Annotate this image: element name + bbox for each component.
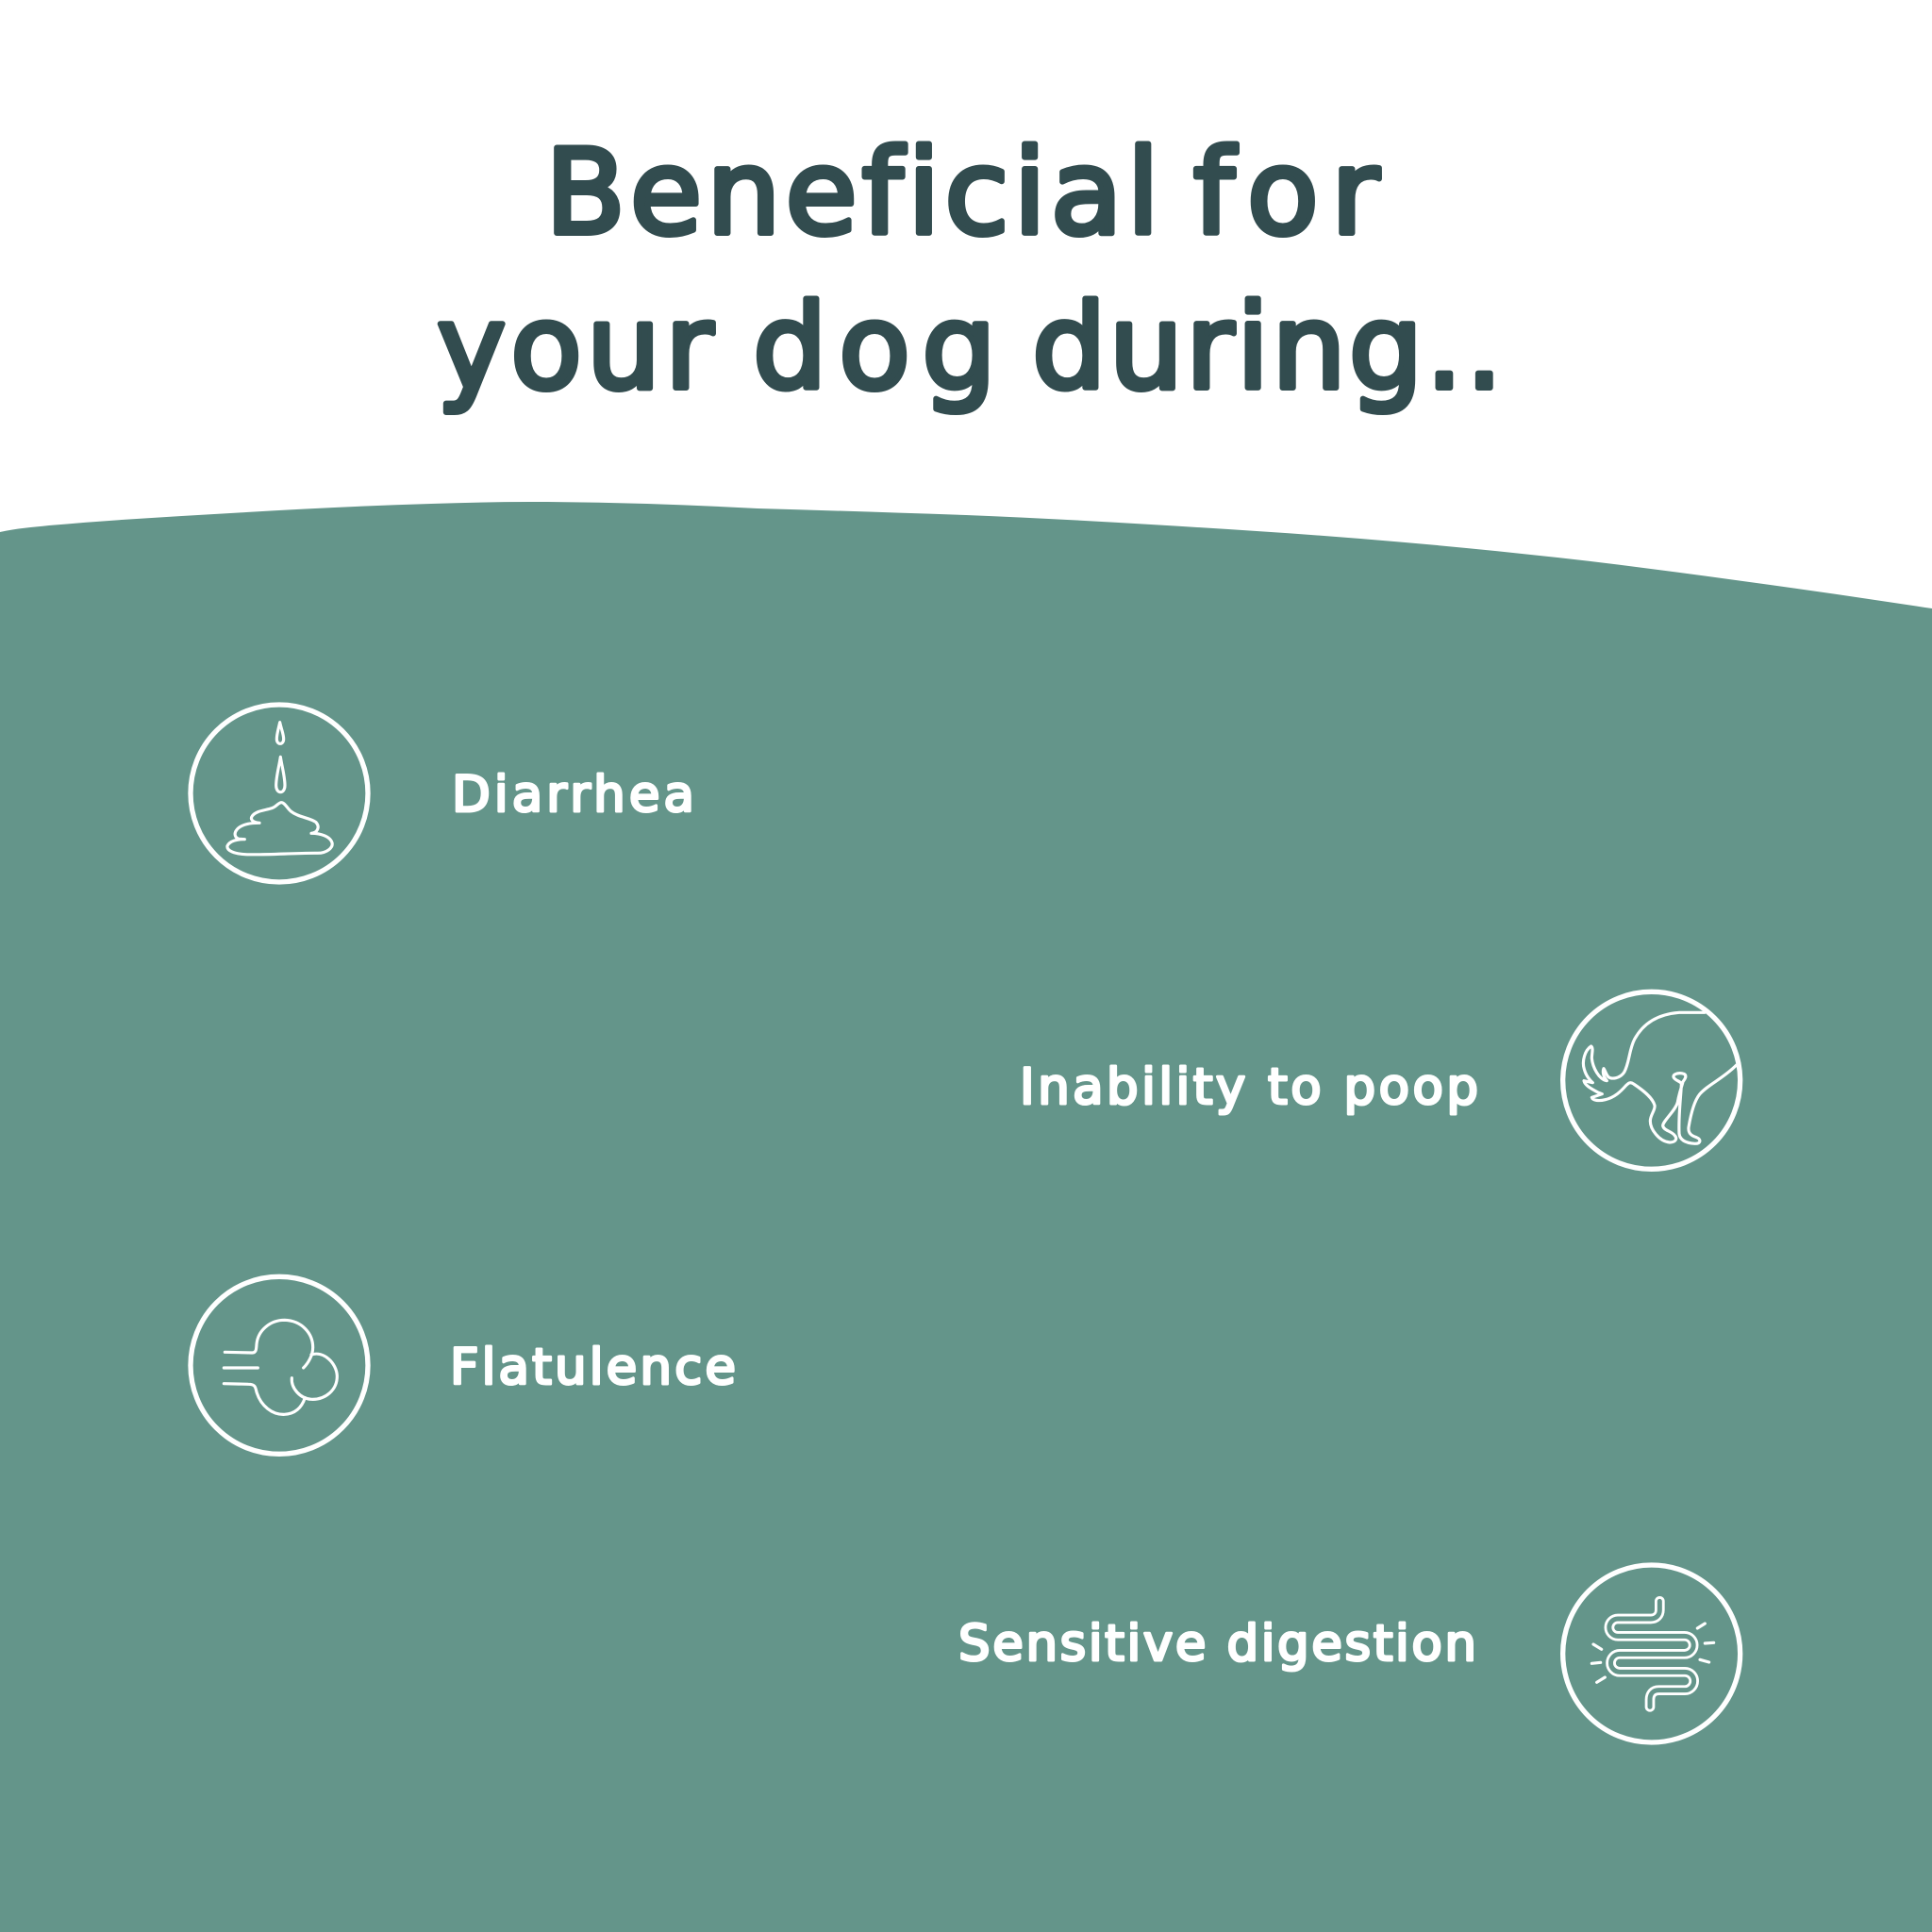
title word: Beneficial: Beneficial xyxy=(545,125,1159,261)
icon: dog straining xyxy=(1563,991,1740,1169)
label: Diarrhea: Diarrhea xyxy=(452,766,694,824)
title word: your: your xyxy=(437,280,713,416)
title word: during..: during.. xyxy=(1032,280,1503,416)
label: Flatulence: Flatulence xyxy=(450,1339,736,1396)
title xyxy=(437,125,1503,416)
title word: dog: dog xyxy=(753,280,996,416)
label: Sensitive digestion: Sensitive digestion xyxy=(958,1615,1476,1673)
title word: for: for xyxy=(1193,125,1379,261)
icon: diarrhea xyxy=(191,705,368,882)
green background panel with curved top xyxy=(0,502,1932,1932)
label: Inability to poop: Inability to poop xyxy=(1020,1058,1478,1116)
icon: gas cloud xyxy=(191,1276,368,1454)
icon: intestines xyxy=(1563,1565,1740,1742)
